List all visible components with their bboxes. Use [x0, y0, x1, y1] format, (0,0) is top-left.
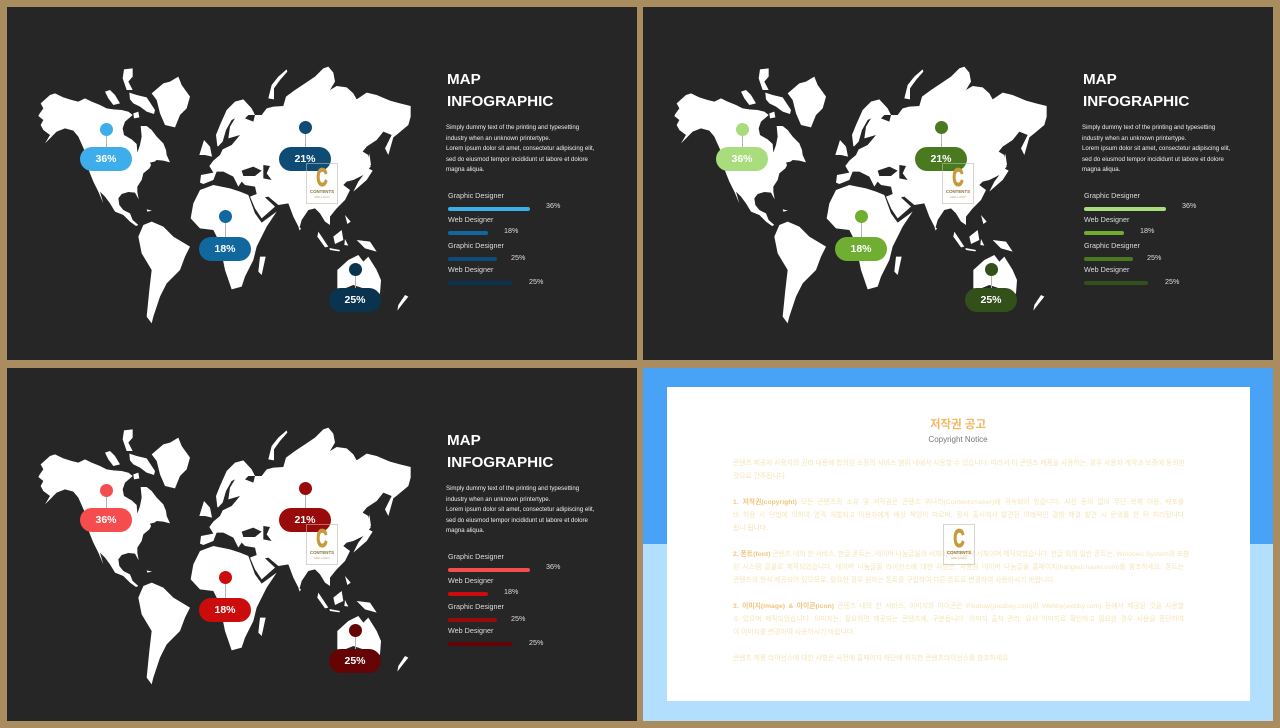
watermark logo	[943, 524, 975, 565]
watermark logo	[306, 524, 338, 565]
pin: africa 18%: 18%	[214, 243, 236, 255]
notice body text: 1. 저작권(copyright) 모든 콘텐츠의 소유 및 저작권은 콘텐츠 위나라(Contentsmaker)에 귀속되어 있습니다. 사전 동의 없이 무단 복제 이용, 배포를	[733, 499, 1184, 506]
bar chart	[1084, 191, 1196, 286]
heading: MAP	[447, 71, 481, 88]
bar chart: 25%	[511, 614, 525, 623]
bar chart: Graphic Designer	[1084, 191, 1140, 200]
pin: north america 36%	[80, 484, 132, 532]
notice body text: 콘텐츠 제공자 사용자의 권리 내용에 합의된 소정의 서비스 범위 내에서 사용할 수 있습니다. 따라서 이 콘텐츠 제품을 사용하는, 경우 사용자 계약과 보증에 동의한	[733, 460, 1185, 467]
pin: australia 25%: 25%	[344, 655, 366, 667]
description text: industry when an unknown printertype.	[446, 496, 550, 502]
description text: Lorem ipsum dolor sit amet, consectetur adipiscing elit,	[1082, 145, 1230, 152]
watermark logo: CONTENTS	[310, 189, 334, 194]
description text: sed do eiusmod tempor incididunt ut labore et dolore	[446, 156, 588, 162]
bar chart: 25%	[1147, 253, 1161, 262]
notice subtitle: Copyright Notice	[928, 435, 988, 444]
notice body text: 3. 이미지(image) & 아이콘(icon) 콘텐츠 내의 한 서비스, 이미지와 아이콘은 Pixabay(pixabay.com)와 Webby(webby.com) 등에서 제공된 것을 사용할	[733, 603, 1184, 610]
notice title: 저작권 공고	[930, 419, 986, 431]
panel: blue map infographic	[7, 7, 637, 360]
notice body text: 것으로 간주됩니다.	[733, 473, 787, 480]
pin: asia 21%: 21%	[294, 514, 316, 526]
bar chart: Web Designer	[448, 576, 493, 585]
bar chart: 36%	[546, 201, 560, 210]
description text: sed do eiusmod tempor incididunt ut labore et dolore	[1082, 156, 1224, 162]
pin: australia 25%	[329, 624, 381, 673]
watermark logo	[942, 163, 974, 204]
description text: magna aliqua.	[1082, 166, 1120, 173]
notice body text: 비 허용 시 민법에 의하여 엄격 처벌되고 이용자에게 배상 책임이 따르며, 정식 출시에서 발견된 이례적인 결함 해결 발견 시 문의를 한 뒤 처리됩니다	[733, 512, 1184, 519]
notice body text: 콘텐츠의 형식 제공되어 있으므로, 필요한 경우 원하는 폰트를 구입하여 다른 폰트로 변경하여 사용하시기 바랍니다.	[733, 577, 1055, 584]
watermark logo: MAIL LOGO	[951, 556, 967, 560]
bar chart: Graphic Designer	[448, 552, 504, 561]
heading: INFOGRAPHIC	[1083, 93, 1189, 110]
bar chart: Web Designer	[1084, 215, 1129, 224]
bar chart: Graphic Designer	[448, 602, 504, 611]
world map	[38, 428, 411, 684]
watermark logo: C	[952, 164, 964, 192]
pin: asia 21%: 21%	[294, 153, 316, 165]
pin: africa 18%	[199, 571, 251, 622]
notice body text: 수 있으며 제작되었습니다. 이미지는, 필요하면 제공되는 콘텐츠에, 구분됩니다. 이미지 출처 관리, 유사 이미지로 확인하고 필요한 경우 사용을 중단하여	[733, 616, 1184, 623]
watermark logo: C	[953, 525, 965, 553]
notice body text: 콘텐츠 제품 라이선스에 대한 사항은 사전에 홈페이지 하단에 위치한 콘텐츠라이선스를 참조하세요.	[733, 655, 1010, 662]
description text: sed do eiusmod tempor incididunt ut labore et dolore	[446, 516, 588, 524]
pin: north america 36%: 36%	[95, 153, 116, 165]
bar chart: 25%	[1165, 277, 1179, 286]
panel: copyright notice	[643, 368, 1273, 721]
bar chart	[448, 191, 560, 286]
watermark logo: MAIL LOGO	[314, 556, 330, 560]
notice body text: 된 시스템 글꼴로 제작되었습니다. 네이버 나눔글꼴 라이선스에 대한 사항은, 사용권 네이버 나눔글꼴 홈페이지(hangeul.naver.com)를 참조하세요. 폰트는	[733, 564, 1184, 571]
description text: Simply dummy text of the printing and typesetting	[1082, 124, 1215, 131]
watermark logo: CONTENTS	[946, 189, 970, 194]
pin: australia 25%	[965, 263, 1017, 312]
pin: north america 36%	[716, 123, 768, 171]
bar chart	[448, 552, 560, 647]
heading	[447, 71, 553, 110]
description text: Simply dummy text of the printing and typesetting	[446, 485, 579, 492]
pin: north america 36%	[80, 123, 132, 171]
pin: north america 36%: 36%	[731, 153, 752, 165]
heading: INFOGRAPHIC	[447, 454, 553, 471]
bar chart: Web Designer	[448, 626, 493, 635]
bar chart: 25%	[511, 253, 525, 262]
world map	[674, 66, 1047, 324]
description text: Lorem ipsum dolor sit amet, consectetur adipiscing elit,	[446, 145, 594, 152]
description text	[1082, 124, 1230, 173]
pin: asia 21%	[279, 482, 331, 532]
watermark logo: C	[316, 525, 328, 553]
heading	[1083, 71, 1189, 110]
world map	[38, 66, 411, 324]
bar chart: 25%	[529, 638, 543, 647]
watermark logo	[306, 163, 338, 204]
pin: north america 36%: 36%	[95, 514, 116, 526]
heading: INFOGRAPHIC	[447, 93, 553, 110]
bar chart: 36%	[1182, 201, 1196, 210]
pin: asia 21%: 21%	[930, 153, 952, 165]
description text: magna aliqua.	[446, 166, 484, 173]
notice body text: 2. 폰트(font) 콘텐츠 내의 한 서비스, 한글 폰트는, 네이버 나눔글꼴의 서체이며 상업적 서체이며 제작되었습니다. 한글 외의 일반 폰트는, Windows System의 포함	[733, 551, 1189, 558]
notice body text: 이 이미지를 변경하여 사용하시기 바랍니다.	[733, 629, 855, 636]
description text: Simply dummy text of the printing and typesetting	[446, 124, 579, 131]
description text: magna aliqua.	[446, 527, 484, 534]
bar chart: 25%	[529, 277, 543, 286]
panel: red map infographic	[7, 368, 637, 721]
panel: green map infographic	[643, 7, 1273, 360]
pin: australia 25%: 25%	[344, 294, 366, 306]
pin: africa 18%	[199, 210, 251, 261]
watermark logo: CONTENTS	[310, 550, 334, 555]
description text: Lorem ipsum dolor sit amet, consectetur adipiscing elit,	[446, 506, 594, 513]
bar chart: Web Designer	[448, 215, 493, 224]
bar chart: Web Designer	[1084, 265, 1129, 274]
heading	[447, 432, 553, 471]
watermark logo: MAIL LOGO	[314, 195, 330, 199]
watermark logo: C	[316, 164, 328, 192]
watermark logo: MAIL LOGO	[950, 195, 966, 199]
bar chart: Web Designer	[448, 265, 493, 274]
watermark logo: CONTENTS	[947, 550, 971, 555]
bar chart: 18%	[504, 587, 518, 596]
notice body text	[733, 459, 1189, 662]
pin: australia 25%	[329, 263, 381, 312]
heading: MAP	[447, 432, 481, 449]
description text: industry when an unknown printertype.	[446, 134, 550, 142]
pin: asia 21%	[915, 121, 967, 171]
white notice card	[667, 387, 1250, 701]
pin: asia 21%	[279, 121, 331, 171]
bar chart: Graphic Designer	[448, 241, 504, 250]
pin: africa 18%	[835, 210, 887, 261]
pin: africa 18%: 18%	[214, 604, 236, 616]
description text: industry when an unknown printertype.	[1082, 134, 1186, 142]
bar chart: 18%	[1140, 226, 1154, 235]
notice body text: 됩니 됩니다.	[733, 525, 768, 532]
pin: africa 18%: 18%	[850, 243, 872, 255]
bar chart: 36%	[546, 562, 560, 571]
bar chart: Graphic Designer	[1084, 241, 1140, 250]
bar chart: 18%	[504, 226, 518, 235]
description text	[446, 485, 594, 534]
heading: MAP	[1083, 71, 1117, 88]
bar chart: Graphic Designer	[448, 191, 504, 200]
pin: australia 25%: 25%	[980, 294, 1002, 306]
description text	[446, 124, 594, 173]
